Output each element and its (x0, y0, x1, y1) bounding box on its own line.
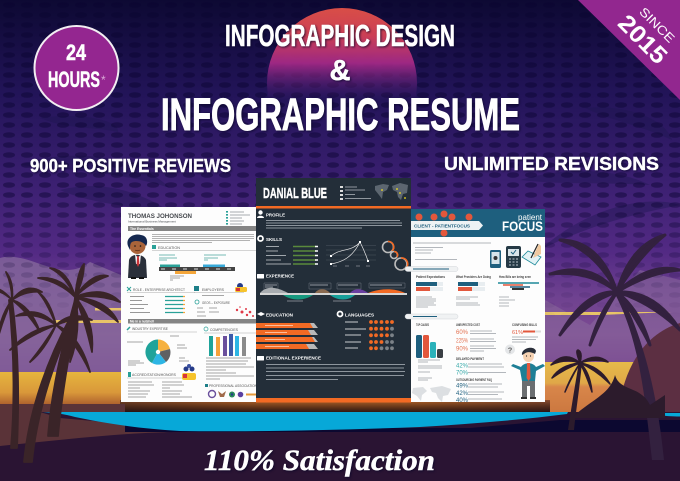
icon: hand signing receipt (522, 244, 541, 265)
role section: ROLE - ENTERPRISE ARCHITECT (133, 288, 186, 292)
badge: 24 hours: * (101, 73, 106, 87)
beach sand right (540, 362, 640, 412)
water (43, 412, 568, 431)
badge: 24 hours: HOURS (48, 67, 100, 92)
professional associations: PROFESSIONAL ASSOCIATION (209, 384, 258, 388)
industry expertise pie chart: INDUSTRY EXPERTISE (132, 327, 169, 331)
unexpected cost stats: UNEXPECTED COST (456, 323, 481, 327)
patient focus logo: patient (518, 213, 543, 222)
experience section (257, 274, 407, 301)
geos exposure section: GEOS – EXPOSURE (202, 301, 230, 305)
role section (127, 287, 195, 312)
panel: resume Thomas Johonson (121, 207, 258, 402)
three column billing charts: How Bills are being seen (499, 275, 531, 279)
outsourcing payment stats: 40% (456, 398, 469, 404)
title: INFOGRAPHIC DESIGN (225, 18, 455, 53)
patient focus logo: FOCUS (502, 218, 543, 234)
left palm trees (0, 264, 120, 462)
text: positive reviews: 900+ POSITIVE REVIEWS (30, 156, 231, 176)
delayed payment stats: 42% (456, 364, 469, 370)
outsourcing payment stats (456, 378, 504, 404)
right palm trees (550, 235, 680, 460)
pill heading: causes (405, 314, 458, 319)
intro text (413, 243, 491, 260)
confusing bills stat: CONFUSING BILLS (512, 323, 538, 327)
editional experience section (257, 356, 405, 380)
section bar: me in a nutshell: Me in a nutshell (130, 320, 154, 324)
icon: phone (490, 250, 501, 268)
education timeline: EDUCATION (158, 246, 180, 250)
panel: Patient Focus infographic (405, 209, 545, 404)
skills section: SKILLS (266, 237, 282, 242)
unexpected cost stats: 60% (456, 330, 469, 336)
name heading: International Business Management (128, 220, 176, 224)
sun (267, 8, 417, 158)
corner ribbon: since 2015: 2015 (612, 10, 672, 70)
unexpected cost stats (456, 323, 496, 352)
icon: world map (375, 183, 408, 200)
competencies bar chart: COMPETENCIES (210, 328, 239, 332)
text: unlimited revisions: UNLIMITED REVISIONS (444, 154, 659, 174)
professional associations (205, 384, 258, 398)
name heading: THOMAS JOHONSON (128, 214, 192, 220)
icon: cartoon man (127, 235, 147, 279)
education timeline (152, 245, 257, 280)
brown hill right (618, 323, 680, 415)
client banner: CLIENT - PATIENTFOCUS (414, 224, 471, 230)
title: INFOGRAPHIC RESUME (161, 89, 520, 140)
summary text (152, 234, 254, 242)
delayed payment stats (456, 357, 506, 376)
name heading: DANIAL BLUE (263, 185, 327, 202)
patient focus logo (502, 213, 543, 234)
beach sand left (0, 372, 125, 406)
top causes cylinder chart: TOP CAUSES (416, 323, 429, 327)
badge: 24 hours: 24 (66, 40, 87, 65)
client banner (411, 221, 483, 230)
contact list (340, 186, 371, 200)
outsourcing payment stats: 49% (456, 384, 469, 390)
unexpected cost stats: 225% (456, 338, 469, 344)
top causes cylinder chart (416, 323, 443, 380)
line chart (326, 241, 376, 266)
languages section with dots: LANGUAGES (345, 312, 374, 318)
header circles (416, 210, 472, 236)
profile section: PROFILE (266, 212, 285, 218)
competencies bar chart (204, 327, 257, 379)
three column billing charts: Patient Expectations (416, 275, 445, 279)
outsourcing payment stats: 42% (456, 391, 469, 397)
section bar: the essentials (128, 226, 257, 231)
section bar: me in a nutshell (128, 319, 257, 324)
three column billing charts (416, 275, 539, 307)
profile section (257, 210, 402, 228)
section bar: the essentials: The Essentials (130, 227, 154, 231)
education section with bars: EDUCATION (266, 312, 294, 318)
text: satisfaction: 110% Satisfaction (204, 444, 435, 477)
sand glow under documents (120, 400, 550, 413)
background mountains (0, 257, 680, 372)
orange footer stripe (256, 398, 411, 402)
accreditation honors list (127, 364, 196, 397)
icon: question bubble: ? (508, 346, 513, 354)
education section with bars (256, 312, 318, 349)
badge: 24 hours (34, 26, 118, 110)
corner ribbon: since 2015: SINCE (636, 5, 677, 46)
donut charts (382, 241, 408, 270)
employers section (194, 283, 247, 296)
delayed payment stats: DELAYED PAYMENT (456, 357, 485, 361)
pill heading: billing (405, 266, 458, 272)
world map grey (412, 386, 451, 402)
icon: cartoon businessman (511, 348, 545, 399)
experience section: EXPERIENCE (266, 274, 294, 278)
panel: resume Danial Blue (256, 178, 411, 402)
header band (411, 209, 545, 237)
title (161, 18, 520, 140)
accreditation honors list: ACCREDITATION/HONORS (132, 373, 177, 377)
languages section with dots (338, 312, 394, 350)
confusing bills stat (512, 323, 541, 342)
dark ground (0, 432, 680, 481)
outsourcing payment stats: OUTSOURCING PAYMENT FAQ (456, 378, 492, 382)
editional experience section: EDITIONAL EXPERIENCE (266, 356, 321, 360)
dotted halftone overlay (3, 42, 680, 298)
icon: question bubble (505, 344, 515, 354)
unexpected cost stats: 90% (456, 346, 469, 352)
industry expertise pie chart (127, 327, 197, 365)
confusing bills stat: 61% (512, 330, 523, 336)
brown foreground shore (0, 404, 170, 448)
orange header stripe (256, 206, 411, 208)
icon: card terminal (506, 246, 521, 268)
skills section (258, 236, 318, 264)
corner ribbon: since 2015 (578, 0, 680, 100)
delayed payment stats: 70% (456, 370, 469, 376)
three column billing charts: What Providers Are Doing (456, 275, 491, 279)
large blurred palm silhouettes (20, 107, 680, 250)
geos exposure section (195, 300, 254, 317)
title: & (330, 55, 351, 87)
name heading (128, 214, 192, 224)
employers section: EMPLOYERS (202, 288, 225, 292)
contact list (226, 211, 250, 225)
background sky (0, 0, 680, 372)
